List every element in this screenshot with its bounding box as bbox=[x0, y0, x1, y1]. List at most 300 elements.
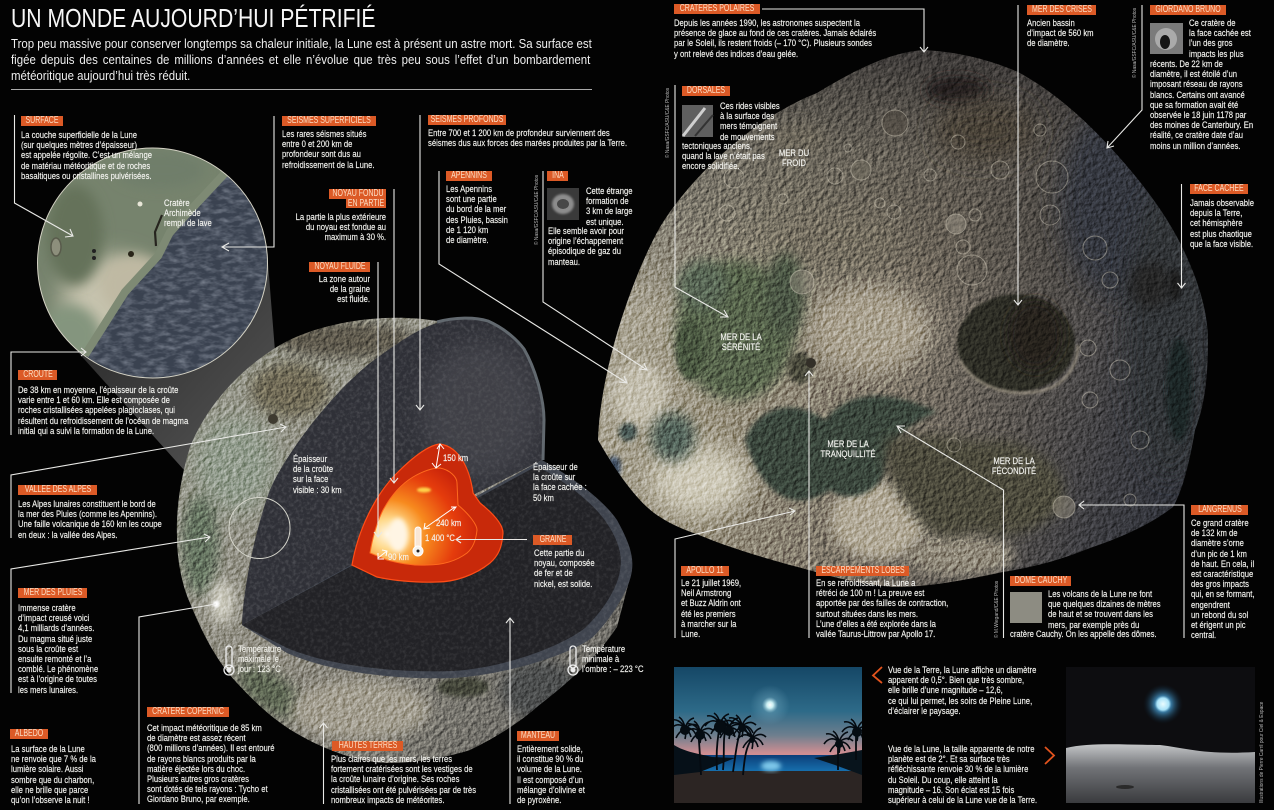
text: noyau fondu: La partie la plus extérieure bbox=[296, 212, 386, 223]
text: cratère Copernic: Cet impact météoritique de 85 km bbox=[147, 723, 262, 734]
text: surface: basaltiques ou cristallines pulvérisées. bbox=[21, 171, 152, 182]
label: température maximale: jour : 123 °C bbox=[238, 664, 281, 675]
arrow: fluid core bbox=[374, 262, 382, 537]
text: Face cachée: est plus chaotique bbox=[1190, 229, 1252, 240]
text: Graine: nickel, est solide. bbox=[534, 579, 592, 590]
text: view from Moon: réfléchissante renvoie 30 % de la lumière bbox=[888, 764, 1028, 775]
panel: Mer des Crises bbox=[1026, 5, 1096, 49]
panel: noyau fluide bbox=[309, 262, 370, 305]
arrow: Hautes terres bbox=[320, 723, 328, 804]
outer surface of the cut-away globe bbox=[170, 310, 640, 770]
intro text: figée depuis des centaines de millions d’années et elle n’évolue que très peu sous l’effet d’un bombardement bbox=[11, 52, 590, 67]
text: cratère Copernic: Giordano Bruno, par exemple. bbox=[147, 794, 250, 805]
text: Dorsales beside image bbox=[720, 102, 779, 143]
arrow: Ina bbox=[543, 171, 647, 370]
text: Ina below image: manteau. bbox=[548, 257, 580, 268]
text: Escarpements lobés: surtout situées dans les mers. bbox=[816, 609, 918, 620]
text: Hautes terres bbox=[331, 754, 476, 806]
text: Apollo 11: à marcher sur la bbox=[681, 619, 736, 630]
intro text: météoritique aujourd’hui très réduit. bbox=[11, 68, 190, 83]
credit: illustrations: Illustrations de Pierre Carril pour Ciel & Espace bbox=[1259, 702, 1265, 803]
label: Mer du Froid: FROID bbox=[782, 158, 806, 169]
text: Dorsales below image: quand la lave n’était pas bbox=[682, 151, 765, 162]
text: surface: est appelée régolite. C’est un mélange bbox=[21, 150, 152, 161]
label: Mer de la Sérénité: MER DE LA bbox=[720, 332, 762, 343]
text: cratère Copernic bbox=[147, 723, 275, 805]
text: Apennins: Les Apennins bbox=[446, 184, 492, 195]
text: cratères polaires: Depuis les années 1990, les astronomes suspectent la bbox=[674, 18, 860, 29]
text: Face cachée: Jamais observable bbox=[1190, 198, 1254, 209]
text: Graine bbox=[534, 548, 595, 590]
text: Hautes terres: nombreux impacts de météorites. bbox=[331, 795, 444, 806]
panel: Mer des Pluies bbox=[18, 588, 98, 696]
title: UN MONDE AUJOURD’HUI PÉTRIFIÉ bbox=[11, 5, 376, 33]
text: Langrenus: et érigent un pic bbox=[1191, 620, 1246, 631]
text: noyau fondu bbox=[296, 212, 386, 243]
text: Mer des Pluies: sous la croûte est bbox=[18, 644, 78, 655]
label: croûte face cachée: Épaisseur de bbox=[533, 462, 578, 473]
photo: view from the Moon with Earth in black sky bbox=[1066, 667, 1255, 803]
panel: Face cachée bbox=[1190, 184, 1260, 250]
text: Manteau: mélange d’olivine et bbox=[517, 785, 585, 796]
text: view from Moon bbox=[888, 745, 1037, 806]
label: Mer de la Fécondité: MER DE LA bbox=[993, 456, 1035, 467]
arrow: croûte bbox=[11, 348, 86, 435]
text: croûte: De 38 km en moyenne, l’épaisseur de la croûte bbox=[18, 385, 178, 396]
text: Dorsales below image: encore solidifiée. bbox=[682, 161, 740, 172]
text: Albédo bbox=[11, 744, 96, 806]
text: séismes superficiels bbox=[282, 129, 375, 171]
text: Apennins: de diamètre. bbox=[446, 235, 489, 246]
panel: surface bbox=[21, 116, 152, 182]
text: Albédo: La surface de la Lune bbox=[11, 744, 85, 755]
text: Manteau: de pyroxène. bbox=[517, 795, 561, 806]
text: Manteau: volume de la Lune. bbox=[517, 764, 582, 775]
text: Apollo 11: Lune. bbox=[681, 629, 700, 640]
text: séismes superficiels: profondeur sont dus au bbox=[282, 149, 361, 160]
intro text: Trop peu massive pour conserver longtemps sa chaleur initiale, la Lune est à présent un astre mort. Sa surface est bbox=[11, 36, 592, 51]
arrow: Face cachée bbox=[1178, 184, 1186, 288]
text: Escarpements lobés: rétréci de 100 m ! La preuve est bbox=[816, 588, 924, 599]
credit: Dôme Cauchy: © M.Wiegand/C&E Photos bbox=[994, 581, 1000, 638]
panel: cratères polaires bbox=[674, 4, 876, 60]
text: view from Moon: du Soleil. Du coup, elle atteint la bbox=[888, 775, 997, 786]
text: Langrenus: de 132 km de bbox=[1191, 528, 1238, 539]
text: croûte: initial qui a suivi la formation de la Lune. bbox=[18, 426, 154, 437]
label: 150 km: 150 km bbox=[443, 453, 468, 464]
text: Apennins: sont une partie bbox=[446, 194, 497, 205]
text: Ina right of image: est unique. bbox=[586, 217, 624, 228]
image: Dorsales ridge bbox=[682, 105, 713, 137]
photo: view from Earth, palm beach at night bbox=[670, 667, 871, 803]
text: Langrenus: est caractéristique bbox=[1191, 569, 1253, 580]
text: Ina below image bbox=[548, 226, 624, 268]
text: Dorsales below image: tectoniques anciens, bbox=[682, 141, 752, 152]
text: surface: (sur quelques mètres d’épaisseur) bbox=[21, 140, 137, 151]
arrow: Vallée des Alpes bbox=[11, 424, 286, 538]
text: Dorsales below image bbox=[682, 142, 765, 173]
text: view from Earth: apparent de 0,5°. Bien que très sombre, bbox=[888, 675, 1024, 686]
text: Giordano Bruno below image bbox=[1150, 60, 1253, 152]
label: température minimale: l’ombre : – 223 °C bbox=[582, 664, 644, 675]
mare: Sérénité bbox=[675, 253, 805, 400]
label: Mer de la Fécondité: FÉCONDITÉ bbox=[992, 466, 1036, 477]
title rule bbox=[11, 88, 592, 90]
text: Langrenus: de haut. En cela, il bbox=[1191, 559, 1254, 570]
text: cratère Copernic: de diamètre est assez récent bbox=[147, 733, 246, 744]
thermometer icon in core bbox=[413, 527, 423, 556]
label: Mer de la Tranquillité: TRANQUILLITÉ bbox=[820, 449, 876, 460]
heading: Graine bbox=[533, 535, 572, 545]
text: Langrenus: d’un pic de 1 km bbox=[1191, 549, 1247, 560]
text: Mer des Crises bbox=[1027, 19, 1094, 50]
text: Face cachée: cet hémisphère bbox=[1190, 218, 1242, 229]
glowing core: fluid layer and solid inner core bbox=[352, 444, 503, 582]
label: Mer de la Sérénité bbox=[701, 333, 781, 353]
arrow: Graine bbox=[456, 536, 527, 543]
text: cratère Copernic: de rayons blancs produits par la bbox=[147, 754, 256, 765]
text: Vallée des Alpes: Les Alpes lunaires constituent le bord de bbox=[18, 499, 156, 510]
text: Mer des Pluies: d’impact creusé voici bbox=[18, 613, 89, 624]
arrow: Manteau bbox=[506, 618, 514, 804]
text: Mer des Pluies: 4,1 milliards d’années. bbox=[18, 623, 94, 634]
crater rim of Crises bbox=[960, 345, 1078, 393]
panel: séismes superficiels bbox=[282, 116, 376, 171]
text: view from Moon: Vue de la Lune, la taille apparente de notre bbox=[888, 744, 1034, 755]
text: Albédo: sombre que du charbon, bbox=[11, 775, 94, 786]
text: croûte: varie entre 1 et 60 km. Elle est composée de bbox=[18, 395, 170, 406]
panel: séismes profonds bbox=[428, 115, 627, 149]
text: Giordano Bruno beside image: l’un des gros bbox=[1189, 38, 1233, 49]
panel: Langrenus bbox=[1191, 505, 1263, 640]
text: noyau fondu: maximum à 30 %. bbox=[325, 232, 386, 243]
text: séismes profonds bbox=[428, 128, 627, 149]
arrow: Escarpements lobés bbox=[805, 371, 813, 638]
text: Apollo 11: Neil Armstrong bbox=[681, 588, 731, 599]
text: Mer des Pluies: les mers lunaires. bbox=[18, 685, 78, 696]
text: séismes profonds: Entre 700 et 1 200 km de profondeur surviennent des bbox=[428, 128, 610, 139]
label: température minimale: Température bbox=[582, 644, 625, 655]
text: Giordano Bruno below image: que sa formation avait été bbox=[1150, 100, 1238, 111]
label: cratère Archimède: Cratère bbox=[164, 198, 190, 209]
label: Mer de la Tranquillité: MER DE LA bbox=[827, 439, 869, 450]
arrow: Apennins bbox=[439, 171, 627, 383]
text: Ina right of image bbox=[586, 186, 633, 228]
text: Langrenus bbox=[1191, 519, 1255, 641]
panel: Giordano Bruno bbox=[1150, 5, 1260, 152]
text: view from Earth: d’éclairer le paysage. bbox=[888, 706, 960, 717]
text: séismes superficiels: entre 0 et 200 km de bbox=[282, 139, 352, 150]
text: Dôme Cauchy beside image: de haut et se trouvent dans les bbox=[1048, 609, 1153, 620]
text: cratère Copernic: sont dotés de tels rayons : Tycho et bbox=[147, 784, 268, 795]
panel: Hautes terres bbox=[331, 741, 476, 806]
text: Hautes terres: cristallisées ont été pulvérisées par de très bbox=[331, 785, 476, 796]
panel: Albédo bbox=[10, 729, 96, 806]
text: noyau fluide: La zone autour bbox=[319, 274, 370, 285]
text: Ina right of image: Cette étrange bbox=[586, 186, 633, 197]
text: Escarpements lobés bbox=[816, 579, 948, 640]
label: Mer de la Fécondité bbox=[974, 457, 1054, 477]
text: view from Earth: Vue de la Terre, la Lune affiche un diamètre bbox=[888, 665, 1036, 676]
label: température maximale: Température bbox=[238, 644, 281, 655]
text: Graine: noyau, composée bbox=[534, 558, 595, 569]
text: Giordano Bruno beside image: Ce cratère de bbox=[1189, 18, 1236, 29]
text: Apennins: de 1 120 km bbox=[446, 225, 488, 236]
text: noyau fluide: est fluide. bbox=[337, 294, 370, 305]
back wall of the interior, upper slab bbox=[240, 316, 545, 631]
mare: Crises bbox=[957, 294, 1075, 392]
text: Vallée des Alpes bbox=[18, 499, 162, 541]
label: croûte face cachée bbox=[533, 462, 587, 504]
arrow: Dorsales bbox=[675, 85, 728, 317]
text: Ina right of image: formation de bbox=[586, 196, 629, 207]
mare: Fécondité bbox=[884, 434, 1064, 537]
text: view from Earth: ce qui lui permet, les soirs de Pleine Lune, bbox=[888, 696, 1032, 707]
label: cratère Archimède: rempli de lave bbox=[164, 218, 212, 229]
panel: Graine bbox=[533, 535, 595, 590]
text: Face cachée bbox=[1190, 199, 1254, 250]
text: Manteau: Il est composé d’un bbox=[517, 775, 583, 786]
panel: Vallée des Alpes bbox=[18, 485, 162, 541]
text: Giordano Bruno below image: moins un million d’années. bbox=[1150, 141, 1240, 152]
label: croûte face visible: Épaisseur bbox=[293, 454, 327, 465]
thickness arrows inside core bbox=[378, 444, 456, 559]
label: croûte face cachée: la face cachée : bbox=[533, 482, 587, 493]
panel: Apollo 11 bbox=[681, 566, 751, 640]
text: Dorsales beside image: mers témoignent bbox=[720, 121, 777, 132]
text: cratère Copernic: (800 millions d’années). Il est entouré bbox=[147, 743, 275, 754]
text: Escarpements lobés: vallée Taurus-Littrow par Apollo 17. bbox=[816, 629, 935, 640]
text: cratères polaires: présence de glace au fond de ces cratères. Jamais éclairés bbox=[674, 28, 876, 39]
text: view from Earth bbox=[888, 666, 1036, 717]
label: Mer de la Sérénité: SÉRÉNITÉ bbox=[722, 342, 760, 353]
arrow: shallow quakes bbox=[222, 116, 274, 251]
text: séismes profonds: séismes dus aux forces des marées produites par la Terre. bbox=[428, 138, 627, 149]
intro text bbox=[11, 36, 592, 83]
text: view from Earth: elle brille d’une magnitude – 12,6, bbox=[888, 685, 1002, 696]
text: Hautes terres: Plus claires que les mers, les terres bbox=[331, 754, 452, 765]
label: croûte face cachée: 50 km bbox=[533, 493, 554, 504]
label: 90 km: 90 km bbox=[388, 552, 409, 563]
chevron: right orange bbox=[1045, 747, 1054, 764]
credit: Dorsales: © Nasa/GSFC/ASU/C&E Photos bbox=[665, 88, 671, 158]
text: noyau fluide: de la graine bbox=[330, 284, 370, 295]
image: Giordano Bruno crater bbox=[1150, 23, 1183, 54]
arrow: deep quakes bbox=[416, 115, 424, 410]
craters bbox=[636, 110, 1149, 556]
text: Mer des Pluies: ensuite remonté et l’a bbox=[18, 654, 91, 665]
heading: Ina bbox=[547, 171, 568, 181]
text: surface: La couche superficielle de la Lune bbox=[21, 130, 137, 141]
big moon: mosaic of the near and far side bbox=[590, 40, 1215, 595]
text: Mer des Crises: Ancien bassin bbox=[1027, 18, 1075, 29]
text: Langrenus: un rebond du sol bbox=[1191, 610, 1248, 621]
label: température maximale: maximale le bbox=[238, 654, 279, 665]
text: Giordano Bruno beside image: impacts les plus bbox=[1189, 49, 1244, 60]
locator circle for lens bbox=[229, 498, 290, 558]
text: Hautes terres: fortement cratérisées sont les vestiges de bbox=[331, 764, 473, 775]
text: Albédo: elle ne brille que parce bbox=[11, 785, 88, 796]
text: Apennins bbox=[446, 184, 508, 246]
label: température maximale bbox=[238, 644, 281, 675]
panel: Dorsales bbox=[682, 86, 782, 173]
label: cratère Archimède: Archimède bbox=[164, 208, 201, 219]
text: Mer des Pluies: Du magma situé juste bbox=[18, 634, 92, 645]
text: Dôme Cauchy beside image: mers, par exemple près du bbox=[1048, 620, 1139, 631]
text: Apennins: du bord de la mer bbox=[446, 204, 506, 215]
label: cratère Archimède bbox=[164, 198, 212, 229]
text: Apollo 11: Le 21 juillet 1969, bbox=[681, 578, 741, 589]
western dark patches bbox=[607, 352, 812, 478]
panel: Escarpements lobés bbox=[816, 566, 961, 640]
image: Cauchy dome bbox=[1010, 592, 1042, 623]
arrow: Giordano Bruno bbox=[1107, 5, 1142, 148]
text: séismes superficiels: Les rares séismes situés bbox=[282, 129, 366, 140]
label: croûte face cachée: la croûte sur bbox=[533, 472, 575, 483]
panel: croûte bbox=[18, 370, 188, 437]
text: Mer des Crises: d’impact de 560 km bbox=[1027, 28, 1094, 39]
label: 240 km: 240 km bbox=[436, 518, 461, 529]
text: Vallée des Alpes: Une faille volcanique de 160 km les coupe bbox=[18, 519, 162, 530]
far-side darkening bbox=[767, 76, 1215, 480]
text: Giordano Bruno beside image bbox=[1189, 19, 1251, 60]
credit: Giordano Bruno: © Nasa/GSFC/ASU/C&E Photos bbox=[1132, 8, 1138, 78]
text: Mer des Pluies: comblé. Le phénomène bbox=[18, 664, 98, 675]
text: Dorsales beside image: de mouvements bbox=[720, 132, 774, 143]
text: Giordano Bruno below image: réalité, ce cratère date d’au bbox=[1150, 130, 1243, 141]
credit: Ina: © Nasa/GSFC/ASU/C&E Photos bbox=[534, 175, 540, 245]
text: Giordano Bruno below image: des moines de Canterbury. En bbox=[1150, 120, 1253, 131]
arrow: Mer des Pluies bbox=[11, 534, 210, 693]
panel: cratère Copernic bbox=[147, 707, 275, 805]
text: cratères polaires: y ont relevé des indices d’eau gelée. bbox=[674, 49, 798, 60]
text: Vallée des Alpes: en deux : la vallée des Alpes. bbox=[18, 530, 117, 541]
label: température minimale: minimale à bbox=[582, 654, 619, 665]
text: Giordano Bruno below image: imposant réseau de rayons bbox=[1150, 79, 1243, 90]
image: Ina formation bbox=[547, 188, 579, 220]
text: view from Moon: supérieur à celui de la Lune vue de la Terre. bbox=[888, 795, 1037, 806]
text: Giordano Bruno beside image: la face cachée est bbox=[1189, 28, 1251, 39]
text: croûte: roches cristallisées appelées plagioclases, qui bbox=[18, 405, 175, 416]
arrow: Mer des Crises bbox=[1014, 5, 1022, 305]
text: surface bbox=[21, 130, 152, 182]
panel: Ina bbox=[547, 171, 633, 268]
text: Langrenus: central. bbox=[1191, 630, 1216, 641]
text: noyau fondu: du noyau est fondue au bbox=[306, 222, 386, 233]
label: croûte face visible: visible : 30 km bbox=[293, 485, 342, 496]
lens: close-up of crater Archimède and regolith bbox=[37, 148, 275, 380]
text: Langrenus: Ce grand cratère bbox=[1191, 518, 1249, 529]
mare: Tranquillité bbox=[745, 396, 937, 500]
text: Albédo: qu’on l’observe la nuit ! bbox=[11, 795, 90, 806]
panel: Manteau bbox=[517, 731, 585, 806]
text: Langrenus: qui, en se formant, bbox=[1191, 589, 1255, 600]
text: croûte bbox=[18, 385, 188, 437]
floor of the cut-away, mantle section bbox=[240, 458, 635, 680]
icon: thermometer minimum bbox=[568, 646, 578, 675]
panel: noyau fondu bbox=[296, 189, 386, 243]
label: 1 400 °C: 1 400 °C bbox=[425, 533, 455, 544]
text: Mer des Crises: de diamètre. bbox=[1027, 38, 1070, 49]
arrow: Copernic bbox=[139, 604, 216, 804]
small moon: cut-away globe showing the interior bbox=[170, 310, 640, 770]
arrow: partly molten core bbox=[390, 189, 398, 483]
text: Ina below image: épisodique de gaz du bbox=[548, 246, 621, 257]
text: cratère Copernic: Plusieurs autres gros cratères bbox=[147, 774, 249, 785]
text: Mer des Pluies: est à l’origine de toutes bbox=[18, 674, 97, 685]
text: view from Moon: magnitude – 16. Son éclat est 15 fois bbox=[888, 785, 1014, 796]
text: Dôme Cauchy beside image bbox=[1048, 590, 1161, 631]
arrow: surface bbox=[14, 115, 73, 237]
light beam linking the lens to the zoomed area bbox=[58, 263, 289, 528]
text: cratères polaires: par le Soleil, ils restent froids (– 170 °C). Plusieurs sondes bbox=[674, 38, 872, 49]
text: Manteau: Entièrement solide, bbox=[517, 744, 583, 755]
text: séismes superficiels: refroidissement de la Lune. bbox=[282, 160, 375, 171]
panel: Apennins bbox=[446, 171, 508, 246]
text: Mer des Pluies bbox=[18, 603, 98, 696]
text: Dôme Cauchy beside image: que quelques dizaines de mètres bbox=[1048, 599, 1161, 610]
text: Manteau bbox=[517, 744, 585, 806]
text: Langrenus: engendrent bbox=[1191, 600, 1230, 611]
text: Ina right of image: 3 km de large bbox=[586, 206, 632, 217]
text: Giordano Bruno below image: observée le 18 juin 1178 par bbox=[1150, 110, 1246, 121]
label: température minimale bbox=[582, 644, 644, 675]
text: Apollo 11: et Buzz Aldrin ont bbox=[681, 598, 741, 609]
text: Mer des Pluies: Immense cratère bbox=[18, 603, 76, 614]
text: Ina below image: Elle semble avoir pour bbox=[548, 226, 624, 237]
arrow: cratères polaires bbox=[762, 9, 928, 52]
text: Apollo 11 bbox=[681, 579, 741, 640]
text: Face cachée: que la face visible. bbox=[1190, 239, 1253, 250]
text: Escarpements lobés: apportée par des failles de contraction, bbox=[816, 598, 948, 609]
label: croûte face visible bbox=[293, 454, 342, 496]
text: Dorsales beside image: à la surface des bbox=[720, 111, 774, 122]
text: croûte: résultent du refroidissement de l’océan de magma bbox=[18, 416, 188, 427]
label: Mer du Froid bbox=[754, 149, 834, 169]
label: croûte face visible: sur la face bbox=[293, 474, 328, 485]
chevron: left orange bbox=[873, 667, 882, 683]
text: Graine: Cette partie du bbox=[534, 548, 584, 559]
panel: Dôme Cauchy bbox=[1010, 576, 1165, 640]
text: Albédo: lumière solaire. Aussi bbox=[11, 764, 84, 775]
text: surface: de matériau météoritique et de roches bbox=[21, 161, 150, 172]
text: Graine: de fer et de bbox=[534, 568, 573, 579]
text: cratère Copernic: matière éjectée lors du choc. bbox=[147, 764, 245, 775]
text: Escarpements lobés: L’une d’elles a été explorée dans la bbox=[816, 619, 936, 630]
text: Albédo: ne renvoie que 7 % de la bbox=[11, 754, 96, 765]
text: Dorsales beside image: Ces rides visibles bbox=[720, 101, 779, 112]
text: cratères polaires bbox=[674, 18, 876, 60]
text: Vallée des Alpes: la mer des Pluies (comme les Apennins). bbox=[18, 509, 157, 520]
arrow: Dôme Cauchy bbox=[897, 426, 1004, 638]
text: Hautes terres: la croûte lunaire d’origine. Ses roches bbox=[331, 774, 459, 785]
text: Dôme Cauchy last line: cratère Cauchy. On les appelle des dômes. bbox=[1010, 629, 1157, 640]
highlands light patches bbox=[612, 285, 1015, 577]
text: Langrenus: diamètre s’orne bbox=[1191, 538, 1244, 549]
text: Langrenus: des gros impacts bbox=[1191, 579, 1249, 590]
text: noyau fluide bbox=[319, 274, 370, 305]
text: Apollo 11: été les premiers bbox=[681, 609, 736, 620]
text: Apennins: des Pluies, bassin bbox=[446, 215, 508, 226]
label: Mer de la Tranquillité bbox=[808, 440, 888, 460]
surface relief bbox=[590, 40, 1215, 595]
text: Dôme Cauchy beside image: Les volcans de la Lune ne font bbox=[1048, 589, 1152, 600]
label: Mer du Froid: MER DU bbox=[779, 148, 809, 159]
arrow: Langrenus bbox=[1079, 501, 1184, 638]
text: Giordano Bruno below image: diamètre, il est étoilé d’un bbox=[1150, 69, 1237, 80]
text: Escarpements lobés: En se refroidissant, la Lune a bbox=[816, 578, 915, 589]
text: Manteau: il constitue 90 % du bbox=[517, 754, 584, 765]
